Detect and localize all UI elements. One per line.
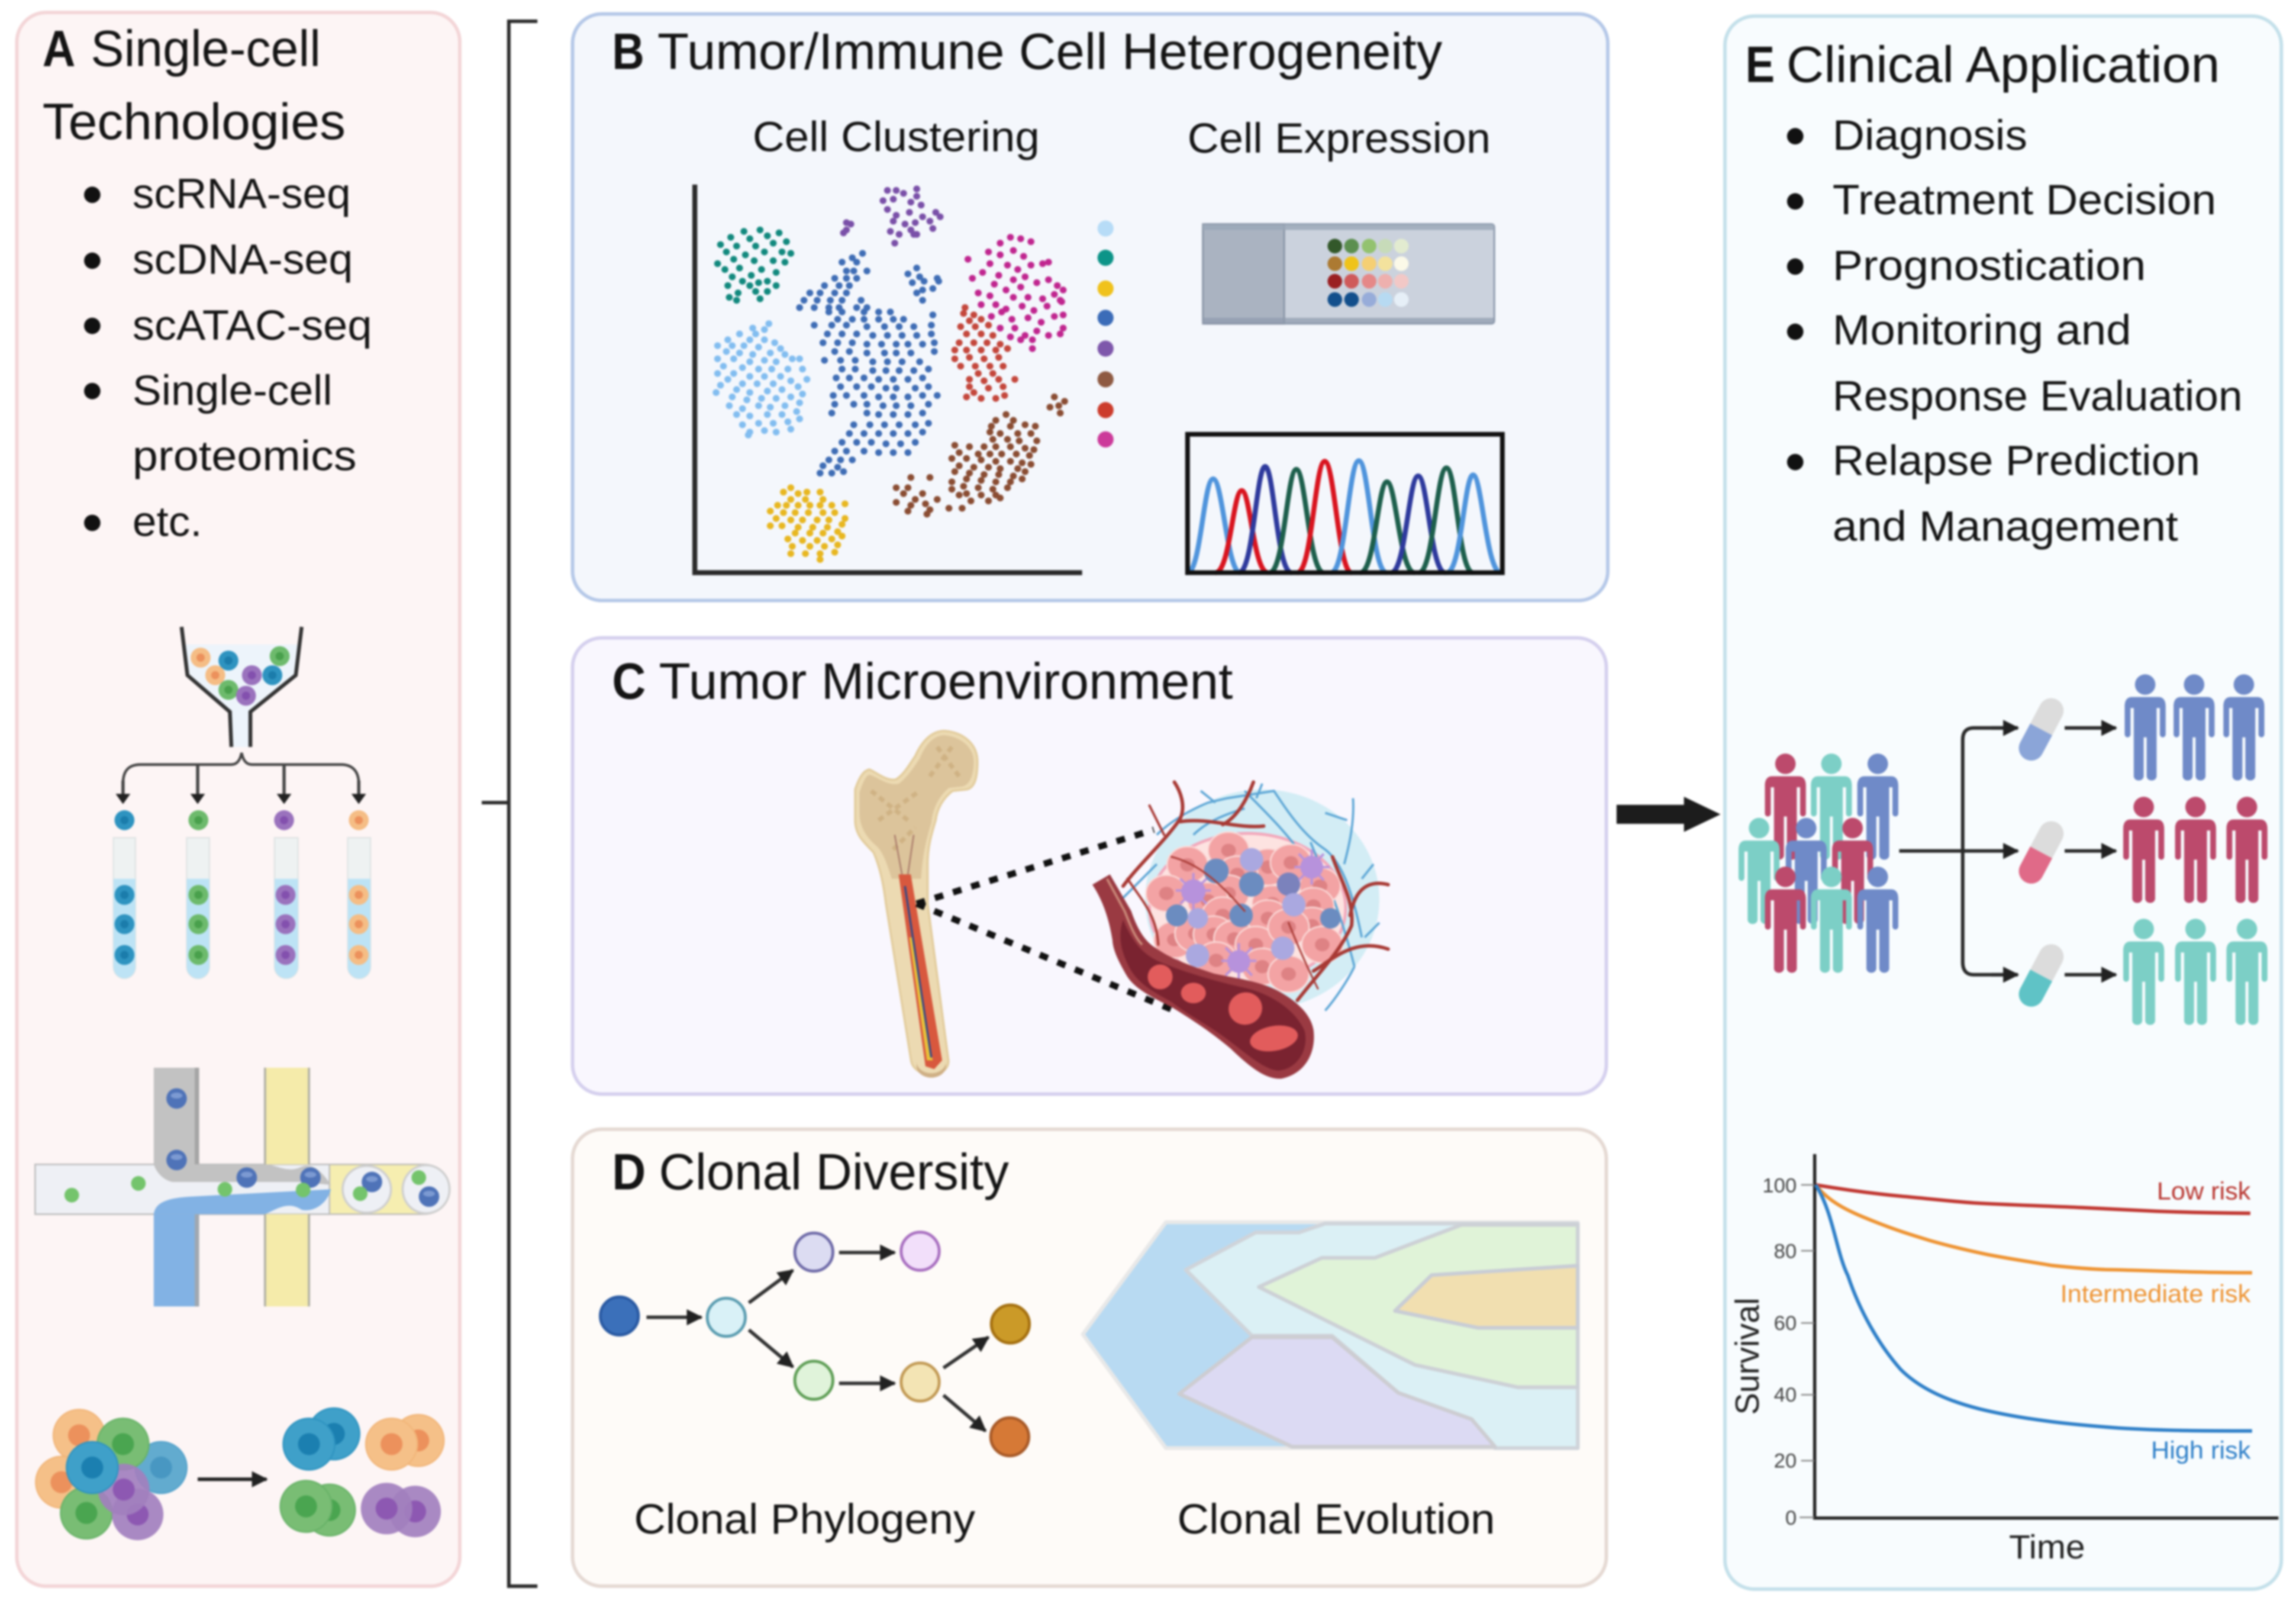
heading E: E [1746, 37, 1775, 94]
panel D box [573, 1129, 1607, 1586]
scatter legend dots [1098, 220, 1114, 447]
illustration: microfluidic droplet device [35, 1068, 450, 1306]
technology list: proteomics [133, 432, 357, 479]
label: cell expression: Cell Expression [1188, 115, 1491, 162]
clinical application list: Prognostication [1833, 242, 2146, 289]
illustration: mixed patient population [1739, 753, 1898, 973]
bracket connecting panel A to panels B, C, D [482, 21, 537, 1586]
survival chart: 80 [1774, 1241, 1797, 1263]
survival chart: Intermediate risk [2060, 1280, 2251, 1307]
patient group: teal [2123, 919, 2268, 1025]
clinical application list: Relapse Prediction [1833, 437, 2200, 484]
heading A: Technologies [43, 94, 346, 150]
survival chart: 100 [1762, 1174, 1797, 1197]
technology list: scRNA-seq [133, 170, 351, 217]
illustration: cell sorting funnel and test tubes [114, 627, 370, 978]
patient group: red [2123, 797, 2268, 903]
illustration: femur bone [855, 731, 978, 1078]
clonal evolution fish plot [1083, 1222, 1578, 1448]
stratification arrows [1899, 728, 2116, 975]
heading A [43, 20, 346, 150]
clinical application list: Monitoring and [1833, 307, 2131, 354]
illustration: mixed cells sorted into clusters [36, 1408, 444, 1540]
heading A: A [43, 20, 75, 77]
arrow from analysis to clinical application [1617, 797, 1721, 832]
panel B: tumor/immune cell heterogeneity [573, 14, 1608, 601]
clinical application list [1787, 112, 2243, 550]
pill: teal treatment [2014, 940, 2068, 1011]
dashed zoom lines [917, 830, 1175, 1010]
illustration: bone marrow niche with tumor cells [1092, 782, 1388, 1079]
survival chart: 60 [1774, 1312, 1797, 1335]
heading D: D [612, 1144, 646, 1200]
clinical application list: Response Evaluation [1833, 372, 2243, 420]
clinical application list: Diagnosis [1833, 112, 2027, 159]
panel B box [573, 14, 1608, 601]
panel D: clonal diversity [573, 1129, 1607, 1586]
panel A: single-cell technologies [17, 12, 460, 1586]
survival chart: 40 [1774, 1384, 1797, 1406]
pill: red treatment [2014, 817, 2068, 888]
heading C: Tumor Microenvironment [659, 653, 1233, 710]
pill: blue treatment [2014, 694, 2068, 765]
technology list: etc. [133, 498, 202, 546]
panel E: clinical application [1725, 16, 2281, 1589]
technology list [84, 170, 372, 546]
panel C box [573, 638, 1607, 1094]
technology list: scATAC-seq [133, 302, 372, 349]
label: cell clustering: Cell Clustering [753, 114, 1040, 161]
label: clonal phylogeny: Clonal Phylogeny [634, 1496, 975, 1543]
survival chart: Survival [1729, 1297, 1766, 1415]
survival chart: 0 [1785, 1507, 1797, 1529]
label: clonal evolution: Clonal Evolution [1177, 1496, 1495, 1543]
survival chart: 20 [1774, 1450, 1797, 1472]
survival chart: Time [2009, 1528, 2085, 1566]
technology list: scDNA-seq [133, 236, 353, 284]
heading C: C [612, 653, 646, 710]
survival chart: High risk [2151, 1436, 2251, 1464]
clinical application list: and Management [1833, 503, 2178, 550]
heading E: Clinical Application [1787, 37, 2220, 94]
t-SNE style scatter plot [695, 185, 1082, 573]
survival chart: Low risk [2157, 1177, 2251, 1205]
panel A box [17, 12, 460, 1586]
patient group: blue [2124, 674, 2265, 781]
technology list: Single-cell [133, 367, 333, 414]
heading A: Single-cell [91, 20, 321, 77]
panel C: tumor microenvironment [573, 638, 1607, 1094]
survival chart [1729, 1154, 2278, 1566]
clinical application list: Treatment Decision [1833, 176, 2216, 224]
microarray slide [1203, 224, 1494, 324]
heading B: B [612, 23, 644, 80]
clonal phylogeny tree [601, 1232, 1030, 1456]
sequencing chromatogram [1188, 434, 1502, 573]
heading D: Clonal Diversity [659, 1144, 1010, 1200]
panel E box [1725, 16, 2281, 1589]
heading B: Tumor/Immune Cell Heterogeneity [657, 23, 1443, 80]
